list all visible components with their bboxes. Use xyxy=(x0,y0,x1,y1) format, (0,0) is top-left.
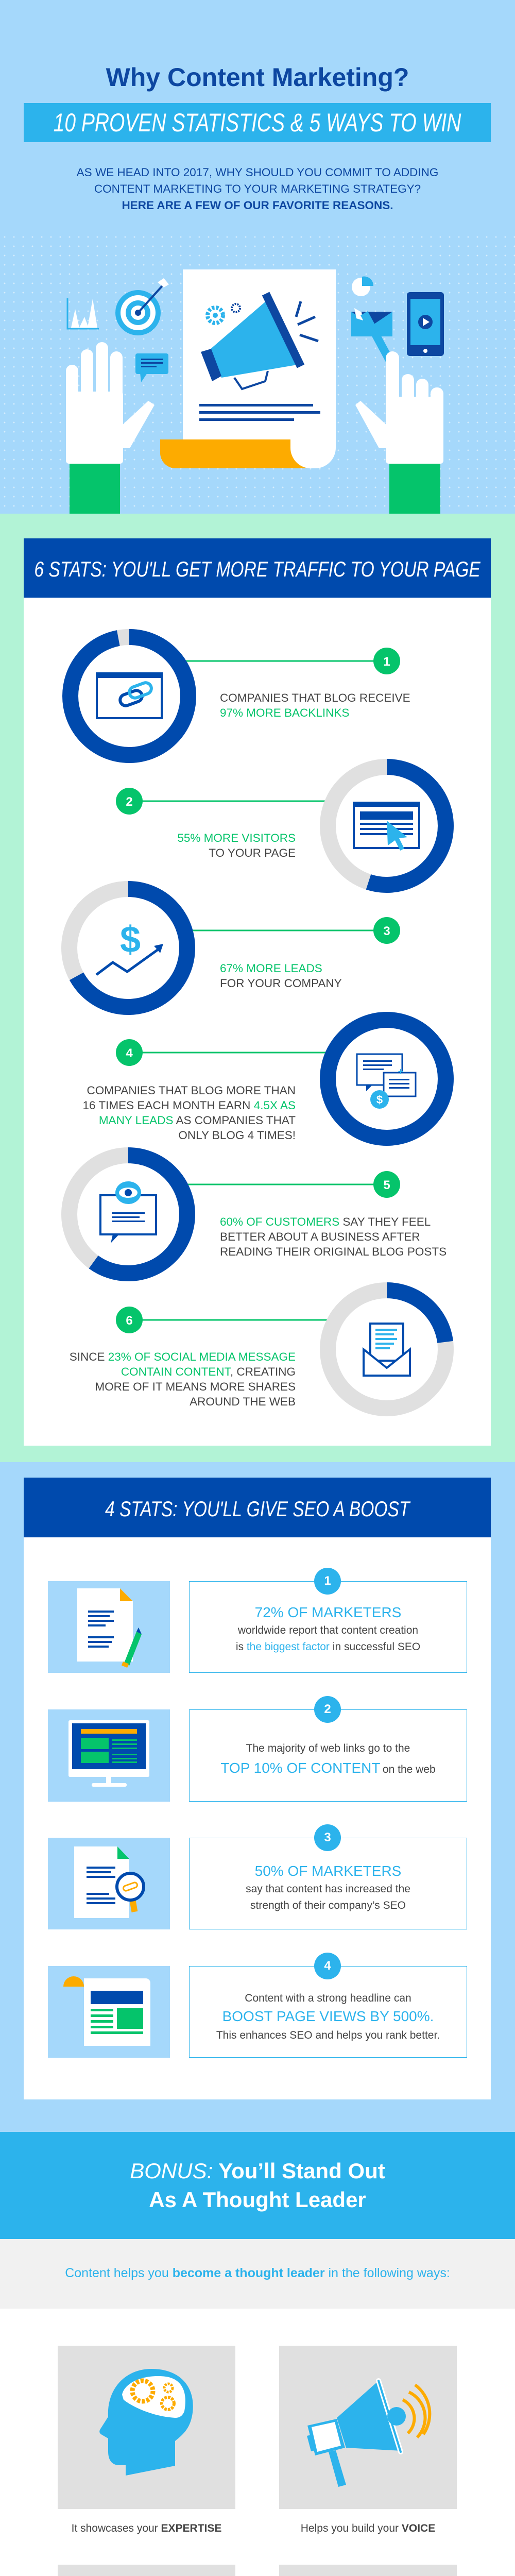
bonus card: niche xyxy=(58,2565,235,2576)
ring 6: 23% xyxy=(328,1290,446,1409)
number badges: 1 xyxy=(383,655,390,669)
icon: document and pencil xyxy=(48,1581,170,1673)
stat text 3 xyxy=(220,962,342,990)
ring 4: full xyxy=(328,1020,446,1138)
stat text 6: CONTAIN CONTENT, CREATING xyxy=(121,1365,296,1378)
stat text 4: 16 TIMES EACH MONTH EARN 4.5X AS xyxy=(83,1099,296,1112)
banner: SEO boost xyxy=(24,1478,491,1537)
number badge xyxy=(314,1696,341,1723)
icon: dollar growth: $ xyxy=(120,919,141,960)
section background: SEO xyxy=(0,1462,515,2132)
number badges: 6 xyxy=(126,1314,133,1328)
icon: browser link xyxy=(97,673,162,718)
text box xyxy=(189,1581,467,1673)
icon: target xyxy=(115,278,169,335)
icon: bubble with eye xyxy=(100,1181,156,1243)
icon: browser cursor xyxy=(354,803,419,851)
icon: envelope xyxy=(351,312,392,336)
bonus intro band: Content helps you become a thought leader in the following ways: xyxy=(65,2266,450,2280)
stat text 1 xyxy=(220,691,410,719)
banner: SEO boost: 4 STATS: YOU'LL GIVE SEO A BOOST xyxy=(105,1497,409,1521)
icon: head with gears xyxy=(58,2346,235,2509)
stat text 3: FOR YOUR COMPANY xyxy=(220,977,342,990)
bonus card: expertise xyxy=(58,2346,235,2534)
stat text 2: 55% MORE VISITORS xyxy=(177,832,296,844)
stat text 2 xyxy=(177,832,296,859)
number badge xyxy=(314,1953,341,1979)
stat text xyxy=(246,1863,410,1911)
SEO item 3 xyxy=(48,1824,467,1929)
icon: megaphone xyxy=(279,2346,457,2509)
panel: traffic stats xyxy=(24,598,491,1446)
icon: pie chart xyxy=(352,277,373,296)
stat text 6: AROUND THE WEB xyxy=(190,1395,296,1408)
number badges: 4 xyxy=(126,1046,133,1060)
stat text 4: ONLY BLOG 4 TIMES! xyxy=(178,1129,296,1142)
icon: newspaper xyxy=(48,1966,170,2058)
icon: share document xyxy=(279,2565,457,2576)
stat text 2: TO YOUR PAGE xyxy=(209,846,296,859)
icon: chat bubble xyxy=(135,353,168,382)
ring 1: 97% xyxy=(70,637,188,755)
icon: target with arrow xyxy=(58,2565,235,2576)
intro text xyxy=(76,166,438,212)
title: Why Content Marketing? xyxy=(106,63,409,92)
icon: bar chart xyxy=(67,298,99,329)
number badge: 4 xyxy=(324,1959,331,1973)
stat text: TOP 10% OF CONTENT on the web xyxy=(220,1760,436,1776)
right hand xyxy=(355,351,443,514)
stat text 5: 60% OF CUSTOMERS SAY THEY FEEL xyxy=(220,1215,431,1228)
caption: It showcases your EXPERTISE xyxy=(72,2522,221,2534)
icon: document magnifier xyxy=(48,1838,170,1929)
stat text: 50% OF MARKETERS xyxy=(255,1863,401,1879)
SEO item 4 xyxy=(48,1953,467,2058)
stat text: BOOST PAGE VIEWS BY 500%. xyxy=(222,2008,434,2024)
icon: pencil xyxy=(354,308,394,365)
stat text 1: 97% MORE BACKLINKS xyxy=(220,706,349,719)
stat text 6: MORE OF IT MEANS MORE SHARES xyxy=(95,1380,296,1393)
SEO item 2 xyxy=(48,1696,467,1802)
stat text xyxy=(220,1742,436,1776)
number badges: 2 xyxy=(126,795,133,809)
text box xyxy=(189,1966,467,2058)
stat text 4 xyxy=(83,1084,296,1142)
icon: paper with megaphone xyxy=(160,269,336,468)
text box xyxy=(189,1838,467,1929)
number badge: 1 xyxy=(324,1574,331,1588)
header illustration xyxy=(66,269,444,514)
number badges: 3 xyxy=(383,924,390,938)
SEO item 1 xyxy=(48,1568,467,1673)
bonus intro band xyxy=(0,2239,515,2309)
number badges xyxy=(116,648,400,1333)
stat text xyxy=(236,1604,420,1653)
header background xyxy=(0,0,515,514)
icon: tablet xyxy=(407,292,444,356)
stat text: worldwide report that content creation xyxy=(238,1624,418,1636)
stat text 6: SINCE 23% OF SOCIAL MEDIA MESSAGE xyxy=(70,1350,296,1363)
stat text: 72% OF MARKETERS xyxy=(255,1604,401,1620)
text box xyxy=(189,1709,467,1802)
number badge xyxy=(314,1568,341,1595)
left hand xyxy=(66,342,154,514)
icon: chat with dollar xyxy=(357,1054,416,1109)
bonus heading: BONUS: You’ll Stand Out xyxy=(130,2159,385,2183)
stat text 4: COMPANIES THAT BLOG MORE THAN xyxy=(87,1084,296,1097)
stat text: strength of their company’s SEO xyxy=(250,1900,406,1911)
stat text 1: COMPANIES THAT BLOG RECEIVE xyxy=(220,691,410,704)
subtitle banner xyxy=(24,103,491,142)
number badge: 2 xyxy=(324,1702,331,1716)
ring 2: 55% xyxy=(328,767,446,885)
intro text: CONTENT MARKETING TO YOUR MARKETING STRATEGY? xyxy=(94,182,421,195)
banner: 6 stats traffic: 6 STATS: YOU'LL GET MORE TRAFFIC TO YOUR PAGE xyxy=(34,557,480,581)
stat text: Content with a strong headline can xyxy=(245,1992,411,2004)
intro text: HERE ARE A FEW OF OUR FAVORITE REASONS. xyxy=(122,199,393,212)
subtitle banner: 10 PROVEN STATISTICS & 5 WAYS TO WIN xyxy=(54,108,461,137)
ring 5: 60% xyxy=(69,1155,187,1274)
icon: chat with dollar: $ xyxy=(376,1093,383,1106)
stat text 3: 67% MORE LEADS xyxy=(220,962,322,975)
caption: Helps you build your VOICE xyxy=(301,2522,435,2534)
intro text: AS WE HEAD INTO 2017, WHY SHOULD YOU COMMIT TO ADDING xyxy=(77,166,438,179)
banner: 6 stats traffic xyxy=(24,538,491,598)
panel: SEO stats xyxy=(24,1537,491,2099)
stat text: This enhances SEO and helps you rank better. xyxy=(216,2029,440,2041)
stat text 6 xyxy=(70,1350,296,1408)
icon: chat with dollar: + xyxy=(398,1066,403,1077)
bonus card: sharing xyxy=(279,2565,457,2576)
section background: mint xyxy=(0,514,515,1462)
stat text 5: READING THEIR ORIGINAL BLOG POSTS xyxy=(220,1245,447,1258)
icon: monitor xyxy=(48,1709,170,1802)
number badges: 5 xyxy=(383,1178,390,1192)
ring 3: 67% xyxy=(69,889,187,1007)
number badge: 3 xyxy=(324,1831,331,1844)
stat text: is the biggest factor in successful SEO xyxy=(236,1641,420,1653)
chart: stat rings and connectors xyxy=(61,629,454,1416)
stat text: The majority of web links go to the xyxy=(246,1742,410,1754)
bonus card: voice xyxy=(279,2346,457,2534)
stat text: say that content has increased the xyxy=(246,1883,410,1895)
icon: envelope document xyxy=(364,1324,410,1376)
number badge xyxy=(314,1824,341,1851)
bonus heading: As A Thought Leader xyxy=(149,2188,366,2212)
stat text 5 xyxy=(220,1215,447,1258)
icon: dollar growth xyxy=(96,919,163,975)
bonus heading xyxy=(0,2132,515,2239)
stat text 5: BETTER ABOUT A BUSINESS AFTER xyxy=(220,1230,420,1243)
stat text 4: MANY LEADS AS COMPANIES THAT xyxy=(99,1114,296,1127)
stat text xyxy=(216,1992,440,2041)
